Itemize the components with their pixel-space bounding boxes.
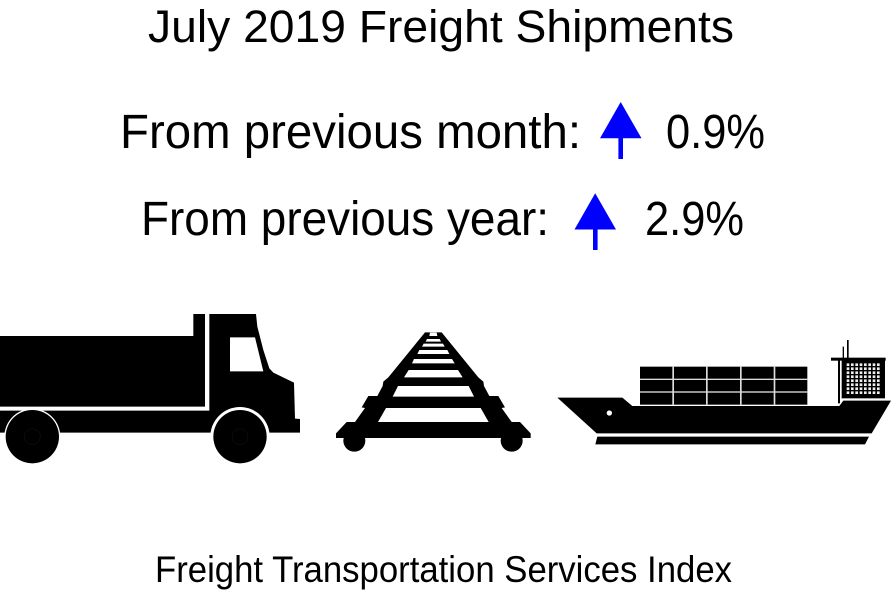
track gaps between ties [378,333,489,422]
ship porthole [607,410,612,416]
icon: blue up arrow, month [600,102,642,159]
title: July 2019 Freight Shipments [148,1,734,52]
ship hull [557,398,891,433]
icon: container ship [557,340,891,444]
icon: blue up arrow, year [574,193,616,250]
track right wheel [501,430,523,452]
track silhouette [336,332,531,438]
truck cargo bed [0,314,205,407]
ship lower stripe [595,437,869,444]
text: from previous year label: From previous year: [141,193,549,246]
text: from previous month label: From previous month: [120,106,581,159]
icon: truck [0,314,300,466]
ship containers [640,367,807,405]
truck front wheel [210,407,270,466]
truck rear wheel [4,409,60,465]
value: year change: 2.9% [645,193,744,246]
truck cab window [230,337,263,371]
track left wheel [343,430,365,452]
icon: railroad track [336,332,531,452]
truck cab and chassis [0,314,300,433]
ship bridge [831,340,886,403]
value: month change: 0.9% [666,106,765,159]
footer caption: Freight Transportation Services Index [155,549,732,590]
